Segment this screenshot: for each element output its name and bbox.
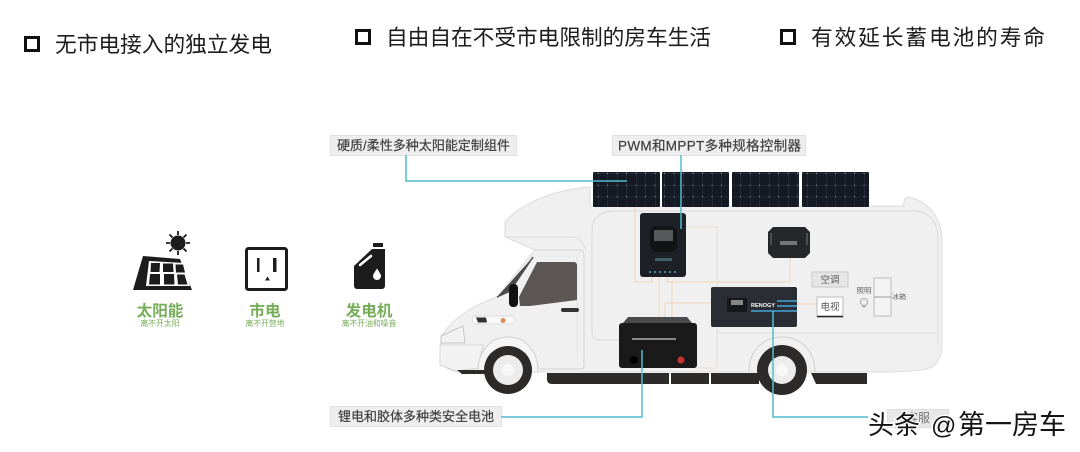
appliance: fridge: 冰箱 xyxy=(892,292,906,301)
callout: solar panels xyxy=(330,136,516,156)
header bullet: battery life: 有效延长蓄电池的寿命 xyxy=(811,25,1045,50)
icon: fuel jug xyxy=(354,243,385,289)
solar panels xyxy=(593,172,869,207)
side window xyxy=(519,262,577,306)
headlight xyxy=(441,326,465,343)
sublabel: generator: 离不开油和噪音 xyxy=(342,318,396,328)
appliance: fridge xyxy=(874,278,906,316)
icon: sun xyxy=(166,231,190,255)
icon group: grid power xyxy=(246,248,286,328)
charge controller xyxy=(640,213,686,277)
appliance: television: 电视 xyxy=(820,301,840,313)
watermark: @ xyxy=(931,412,956,440)
living area outline xyxy=(592,211,938,345)
bumper xyxy=(440,345,483,371)
lower body line xyxy=(717,332,936,334)
callout: controllers: PWM和MPPT多种规格控制器 xyxy=(618,138,802,154)
icon group: generator xyxy=(342,243,396,328)
RV illustration xyxy=(440,187,942,395)
rear wheel arch xyxy=(749,337,815,372)
header bullet: independent power: 无市电接入的独立发电 xyxy=(55,32,272,57)
battery xyxy=(619,317,697,368)
icon: outlet xyxy=(246,248,286,290)
appliance: air conditioner: 空调 xyxy=(820,274,840,286)
watermark: 第一房车 xyxy=(958,410,1066,440)
cab door outline xyxy=(535,250,584,369)
label: generator: 发电机 xyxy=(346,301,393,320)
side marker xyxy=(472,316,515,324)
battery monitor xyxy=(768,227,810,258)
overcab lower line xyxy=(507,237,586,250)
RV body xyxy=(440,187,942,372)
windshield strip xyxy=(497,257,533,297)
watermark: 头条 xyxy=(868,410,920,440)
callout: batteries: 锂电和胶体多种类安全电池 xyxy=(338,409,494,424)
front wheel xyxy=(484,346,532,394)
callout: inverter (partly covered): 客服 xyxy=(906,410,930,425)
wiring xyxy=(635,207,817,368)
inverter xyxy=(711,287,797,327)
front wheel arch xyxy=(478,337,538,371)
appliance: air conditioner xyxy=(812,272,848,287)
leader lines xyxy=(406,155,868,417)
callout: solar panels: 硬质/柔性多种太阳能定制组件 xyxy=(337,138,510,153)
icon: solar panel xyxy=(133,256,192,290)
rear wheel xyxy=(757,345,807,395)
appliance: lighting: 照明 xyxy=(856,286,872,295)
callout: batteries xyxy=(330,406,502,426)
inverter: RENOGY xyxy=(751,303,775,309)
inner door line xyxy=(538,256,577,355)
appliance: television xyxy=(817,297,843,317)
appliance: lighting xyxy=(856,286,872,306)
sublabel: solar: 离不开太阳 xyxy=(141,318,180,328)
sublabel: grid: 离不开营地 xyxy=(246,318,285,328)
mirror xyxy=(509,284,518,307)
icon group: solar energy xyxy=(133,231,192,328)
door handle xyxy=(561,308,579,312)
header bullet: RV freedom: 自由自在不受市电限制的房车生活 xyxy=(386,25,711,50)
callout: inverter (partly covered) xyxy=(888,410,948,428)
label: solar: 太阳能 xyxy=(137,301,184,320)
chassis xyxy=(457,370,867,384)
label: grid: 市电 xyxy=(249,301,281,320)
